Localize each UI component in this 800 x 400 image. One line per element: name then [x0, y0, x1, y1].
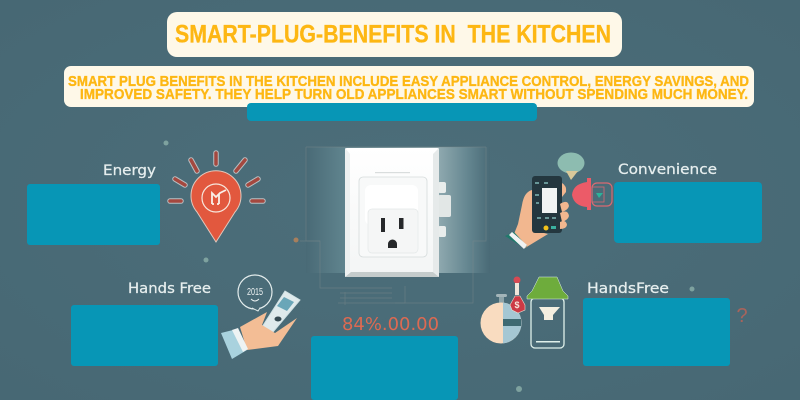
heading: hands free: Hands Free — [128, 281, 211, 297]
icon: timer, price tag and jar — [480, 276, 568, 348]
title banner — [167, 12, 622, 57]
panel: hands free right — [583, 281, 730, 366]
background dots — [164, 140, 694, 392]
heading: handsfree: HandsFree — [587, 281, 669, 297]
stat figure: 84%.00.00 — [342, 314, 439, 335]
energy box — [27, 184, 160, 245]
panel: hands free left — [71, 281, 218, 366]
hand — [240, 312, 297, 350]
convenience box — [614, 182, 762, 243]
hands free box — [71, 305, 218, 366]
side buttons — [438, 182, 446, 193]
circuit backdrop — [300, 147, 486, 305]
intro text panel: IMPROVED SAFETY. THEY HELP TURN OLD APPLIANCES SMART WITHOUT SPENDING MUCH MONEY. — [80, 86, 748, 103]
intro text panel — [64, 66, 754, 107]
inner frame — [359, 177, 427, 257]
icon: energy location pin with rays — [170, 153, 263, 242]
slots — [381, 218, 385, 232]
handsfree box — [583, 298, 730, 366]
teal bar under intro — [247, 103, 537, 121]
plate — [345, 148, 439, 277]
adapter top — [365, 185, 418, 225]
question mark: ? — [736, 305, 748, 327]
heading: convenience: Convenience — [618, 162, 717, 178]
icon: hand with phone and speech bubble: 2015 — [247, 287, 263, 298]
fingers — [560, 183, 569, 229]
center box — [311, 336, 458, 400]
heading: energy: Energy — [103, 163, 156, 179]
panel: convenience — [614, 162, 762, 243]
icon: timer, price tag and jar: $ — [514, 300, 520, 310]
price tag — [510, 296, 525, 313]
hand — [514, 190, 548, 248]
glow behind outlet — [306, 147, 490, 273]
icon: wall outlet smart plug — [345, 148, 451, 277]
bubble — [558, 152, 584, 174]
phone — [262, 291, 300, 332]
phone — [532, 176, 562, 233]
icon: hand with phone and plug — [505, 152, 612, 249]
socket face — [368, 209, 418, 253]
jar — [531, 298, 564, 348]
timer — [499, 295, 504, 304]
title banner: SMART-PLUG-BENEFITS IN THE KITCHEN — [175, 20, 611, 48]
panel: energy — [27, 163, 160, 245]
plug — [592, 183, 612, 206]
icon: hand with phone and speech bubble — [221, 275, 300, 359]
